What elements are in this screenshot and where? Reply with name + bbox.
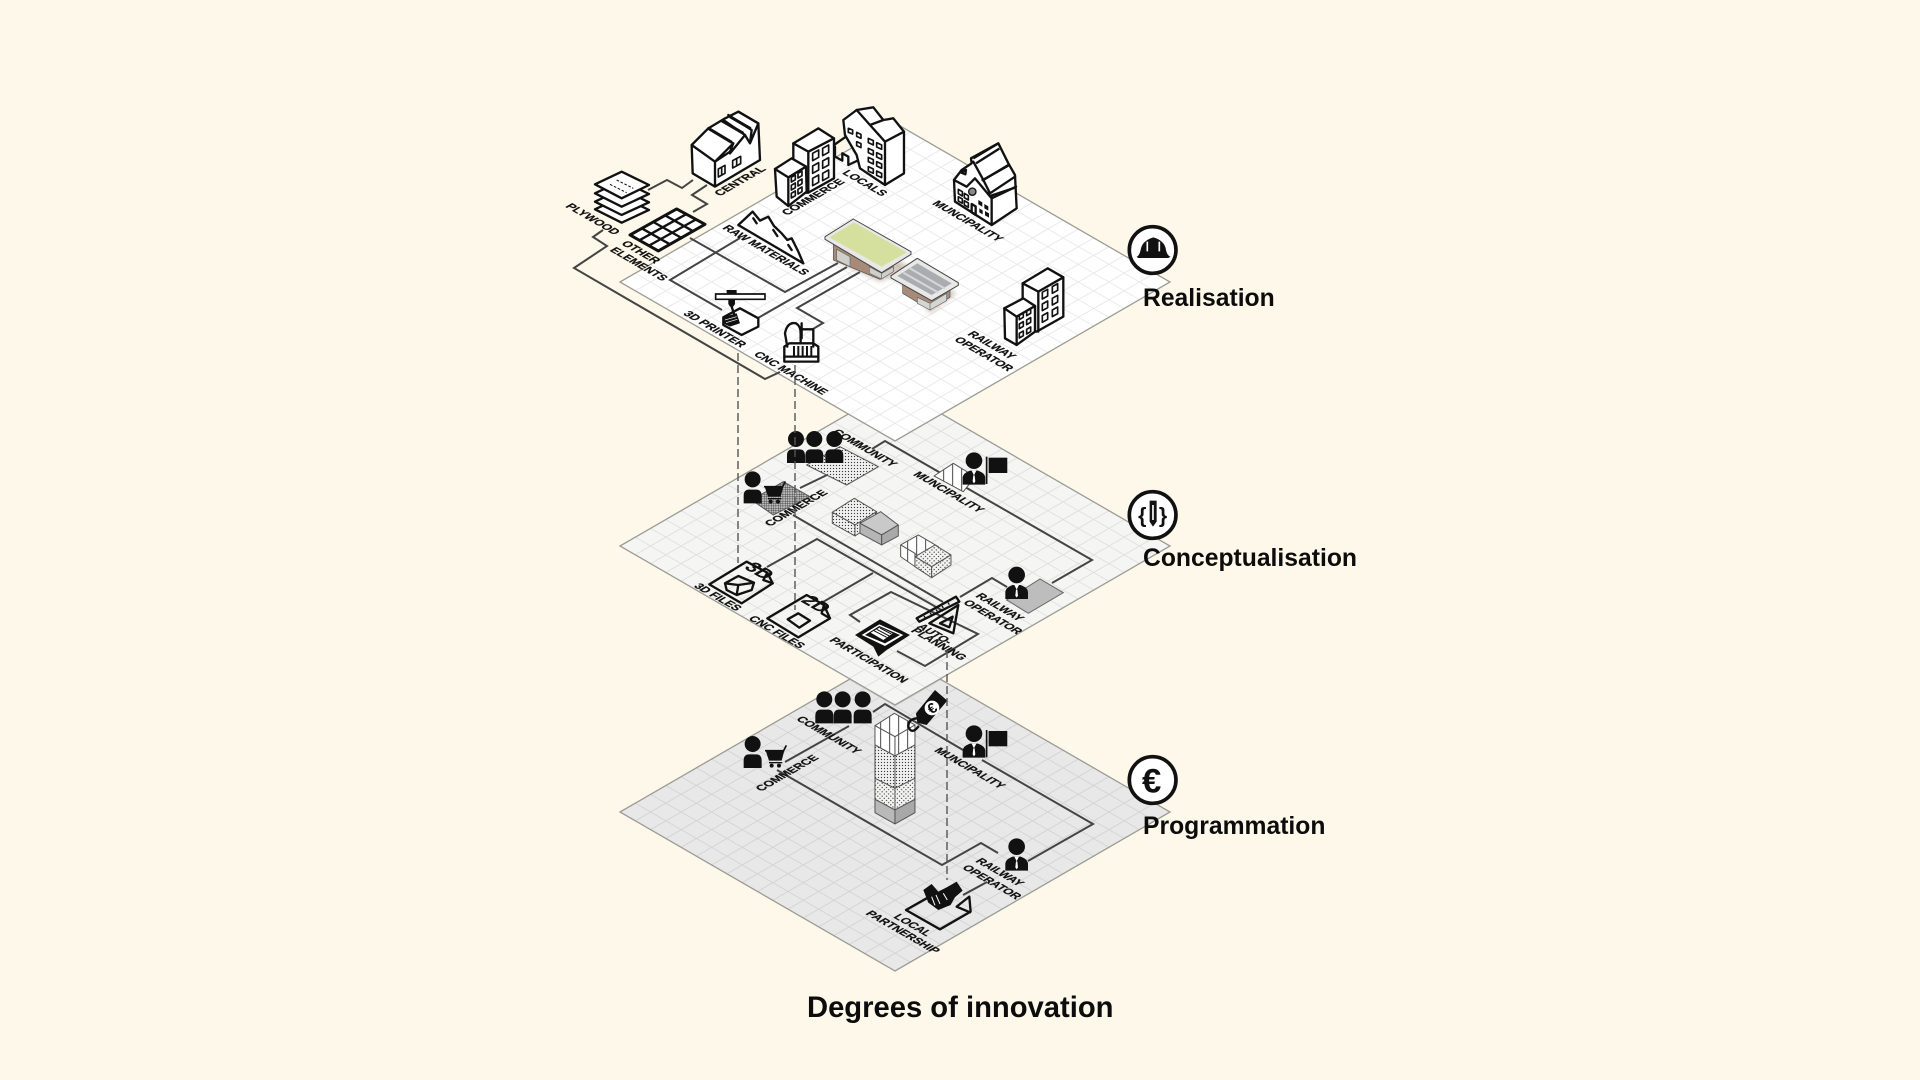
panel: Realisation layer xyxy=(562,107,1170,441)
label: railway: RAILWAY xyxy=(972,857,1027,888)
icon: 3D files xyxy=(709,560,779,603)
label: local: LOCAL xyxy=(890,913,934,938)
panel: Programmation layer xyxy=(620,653,1170,971)
icon: other elements panel xyxy=(630,209,705,251)
label: municipality: MUNCIPALITY xyxy=(910,470,987,515)
plate: realisation grid xyxy=(620,123,1170,441)
swatch: commerce hatch xyxy=(752,482,810,515)
panel: Conceptualisation layer xyxy=(620,387,1170,705)
label: participation: PARTICIPATION xyxy=(826,636,910,685)
label: municipality: MUNCIPALITY xyxy=(931,746,1008,791)
blocks: massing models xyxy=(832,498,951,578)
icon: automated planning ruler and triangle xyxy=(917,597,959,633)
label: commerce: COMMERCE xyxy=(762,488,831,528)
icon: railway operator person xyxy=(1005,567,1028,599)
icon: railway operator building xyxy=(1004,268,1063,345)
label: central: CENTRAL xyxy=(712,165,769,198)
label: 3D printer: 3D PRINTER xyxy=(680,310,749,349)
icon: raw materials mountains xyxy=(738,212,803,263)
icon: helmet badge xyxy=(1129,227,1176,273)
icon: participation speech bubble xyxy=(855,619,910,657)
label: CNC files: CNC FILES xyxy=(745,615,808,651)
icon: commerce person and cart xyxy=(744,736,786,768)
label: auto-: AUTO- xyxy=(914,623,955,646)
label: operator: OPERATOR xyxy=(959,864,1024,901)
icon: code pencil badge: } xyxy=(1159,504,1167,528)
icon: community people xyxy=(787,431,843,463)
icon: programme tower xyxy=(875,713,915,824)
heading: Realisation: Realisation xyxy=(1143,285,1275,312)
label: 3D files: 3D FILES xyxy=(691,582,744,613)
label: elements: ELEMENTS xyxy=(607,246,671,283)
label: plywood: PLYWOOD xyxy=(562,202,622,237)
label: CNC machine: CNC MACHINE xyxy=(750,350,831,397)
icon: euro price tag: € xyxy=(925,700,941,718)
label: commerce: COMMERCE xyxy=(753,753,822,793)
icon: municipality person and flag xyxy=(963,725,1007,758)
icon: CNC files xyxy=(767,593,835,637)
icon: commerce building xyxy=(775,128,834,206)
swatch: municipality stripes xyxy=(934,463,975,492)
label: community: COMMUNITY xyxy=(793,715,864,756)
plate: conceptualisation grid xyxy=(620,387,1170,705)
icon: 3D printer xyxy=(716,290,765,335)
label: operator: OPERATOR xyxy=(951,336,1016,373)
icon: code pencil badge: { xyxy=(1138,504,1146,528)
title: Degrees of innovation: Degrees of innovation xyxy=(807,992,1114,1024)
icon: euro badge: € xyxy=(1142,762,1161,800)
swatch: community dots xyxy=(807,447,878,485)
icon: CNC machine xyxy=(784,323,818,362)
connection lines: realisation xyxy=(574,180,860,379)
label: partnership: PARTNERSHIP xyxy=(862,909,943,956)
plate: programmation grid xyxy=(620,653,1170,971)
connection lines: conceptualisation xyxy=(767,441,1092,666)
label: commerce: COMMERCE xyxy=(779,177,848,217)
icon: 3D files: 3D xyxy=(739,560,779,583)
icon: CNC files: 2D xyxy=(796,593,835,616)
label: municipality: MUNCIPALITY xyxy=(929,199,1006,244)
icon: local partnership handshake xyxy=(906,882,971,929)
icon: code pencil badge xyxy=(1129,492,1176,538)
label: raw materials: RAW MATERIALS xyxy=(719,224,812,277)
icon: central factory xyxy=(692,112,760,187)
swatch: railway grey xyxy=(1007,579,1063,613)
dashed connectors between layers xyxy=(738,353,947,880)
label: other: OTHER xyxy=(618,240,663,265)
label: locals: LOCALS xyxy=(839,169,890,198)
icon: municipality town hall xyxy=(954,143,1017,225)
label: railway: RAILWAY xyxy=(972,592,1027,623)
icon: municipality person and flag xyxy=(963,452,1007,485)
icon: plywood stack xyxy=(595,172,649,223)
icon: euro badge xyxy=(1129,757,1176,803)
label: railway: RAILWAY xyxy=(964,330,1019,361)
model: station building xyxy=(825,219,958,313)
icon: community people xyxy=(815,691,872,723)
label: operator: OPERATOR xyxy=(960,599,1025,636)
connection lines: programmation xyxy=(777,704,1093,895)
icon: railway operator person xyxy=(1005,838,1028,871)
heading: Conceptualisation: Conceptualisation xyxy=(1143,545,1357,572)
icon: commerce person and cart xyxy=(744,471,785,504)
label: planning: PLANNING xyxy=(908,627,969,662)
label: community: COMMUNITY xyxy=(829,428,900,469)
heading: Programmation: Programmation xyxy=(1143,813,1325,840)
icon: euro price tag xyxy=(908,690,947,731)
icon: locals building xyxy=(834,107,904,185)
